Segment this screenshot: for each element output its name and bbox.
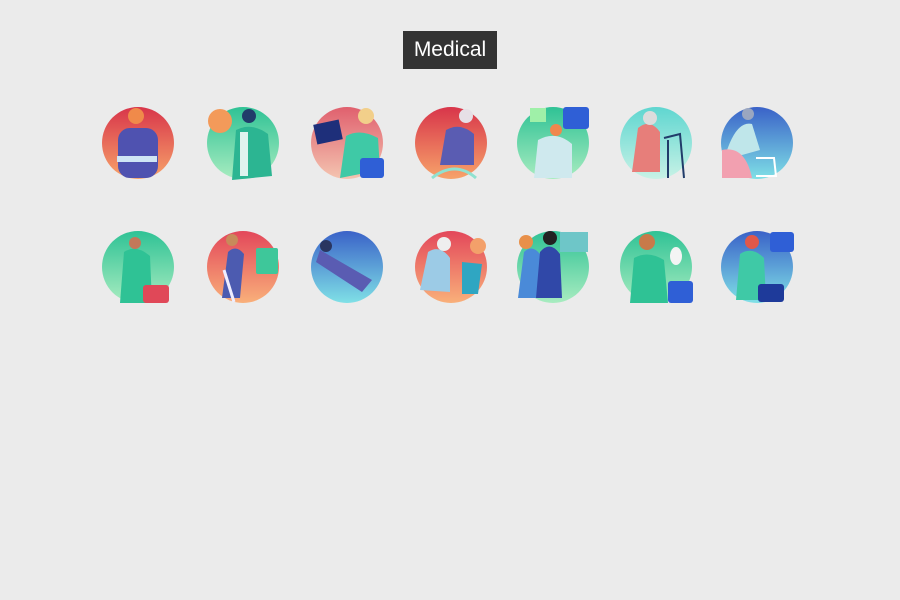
icon: elderly in wheelchair	[415, 107, 487, 179]
icon: patient lying	[311, 231, 383, 303]
icon: nurse with medical kit	[721, 231, 794, 303]
icon: dentist x-ray	[311, 107, 384, 179]
icon: elderly with walker	[620, 107, 692, 179]
icon: family with heart	[415, 231, 487, 303]
title	[403, 31, 497, 69]
icon: doctor with x-ray	[517, 107, 589, 179]
icon: doctor with speech bubble	[207, 107, 279, 180]
icon: patient with crutch	[207, 231, 279, 303]
title: Medical	[414, 38, 486, 61]
icon: doctor with medical kit	[102, 231, 174, 303]
icon: pregnant couple	[517, 231, 589, 303]
icon: surgeon	[102, 107, 174, 179]
icon: doctor with stethoscope	[620, 231, 693, 303]
icon: elderly with frame	[721, 107, 793, 179]
